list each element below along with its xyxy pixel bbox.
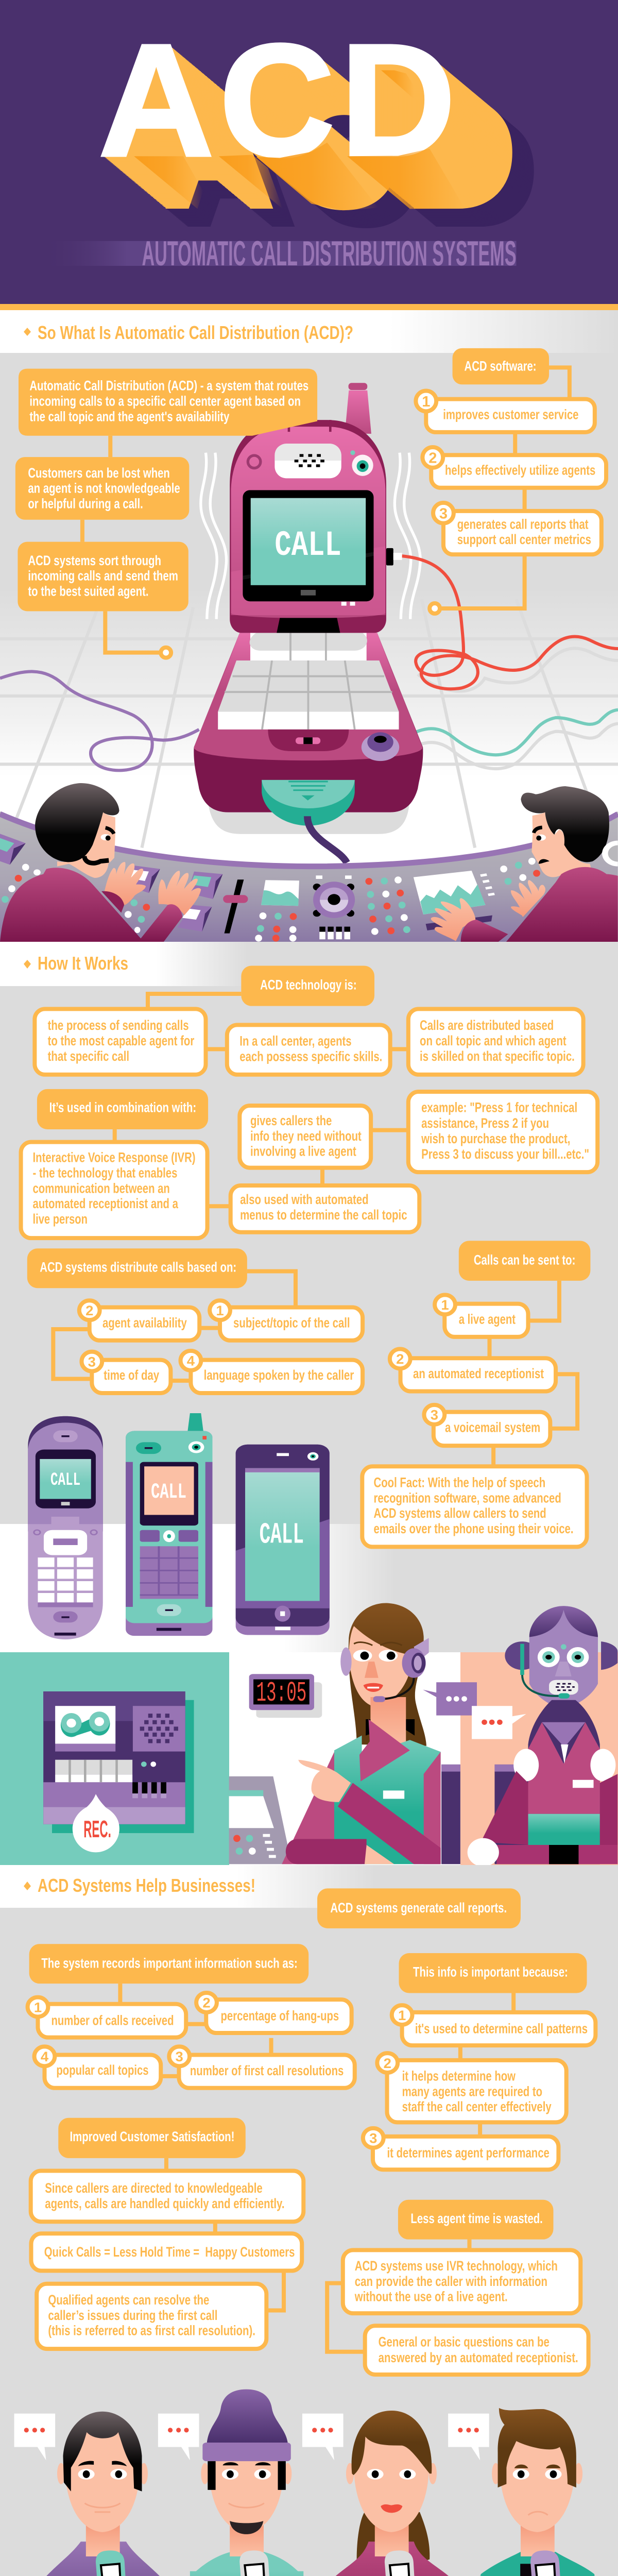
speech bubble: white	[472, 1706, 526, 1739]
box: example	[408, 1092, 597, 1172]
camera eye	[352, 454, 373, 476]
icon: digital clock: 13:05	[256, 1677, 306, 1709]
box: used in combination: It’s used in combination with:	[49, 1099, 196, 1115]
item: language: language spoken by the caller	[204, 1367, 354, 1383]
speech bubble: purple	[423, 1682, 477, 1716]
item: agent performance	[363, 2128, 558, 2170]
icon: lavender flip phone	[28, 1416, 103, 1639]
box: automated menus: menus to determine the call topic	[240, 1207, 407, 1223]
teal cord	[394, 710, 618, 755]
teal pocket	[262, 780, 355, 826]
definition box	[19, 369, 317, 436]
item 2: 2	[428, 450, 437, 467]
item: voicemail	[424, 1405, 550, 1446]
item: call patterns: 1	[398, 2008, 406, 2023]
panel: ACD software list	[416, 348, 606, 614]
box: ACD technology is	[241, 966, 374, 1006]
phone upper body	[230, 420, 402, 633]
title shading on extruded letters	[134, 70, 458, 210]
box: agent skills	[227, 1025, 390, 1075]
illustration: pink flip phone with cords	[0, 383, 618, 863]
speech bubble	[158, 2414, 199, 2460]
vibration lines	[201, 453, 420, 619]
item: number of calls: number of calls received	[51, 2012, 174, 2028]
purple cable	[307, 816, 347, 863]
sorting box: ACD systems sort through	[28, 553, 161, 568]
item: voicemail: a voicemail system	[445, 1419, 540, 1435]
item: time of day: time of day	[104, 1367, 159, 1383]
box: IVR technology	[343, 2250, 580, 2313]
item: first call resolutions	[169, 2046, 355, 2088]
icon: smartphone: CALL	[260, 1519, 304, 1552]
section heading: So What Is ACD: So What Is Automatic Call Distribution (ACD)?	[38, 322, 353, 343]
robot agent	[468, 1606, 617, 1867]
box: gives callers info: involving a live agent	[250, 1143, 356, 1159]
box: process of sending calls: that specific call	[48, 1048, 129, 1064]
item: automated receptionist	[390, 1349, 556, 1392]
section heading: How It Works: How It Works	[38, 953, 128, 974]
phone upper body: CALL	[274, 526, 341, 566]
left operator	[0, 783, 201, 942]
item 1: 1	[422, 394, 430, 410]
console fragment	[229, 1776, 291, 1864]
purple cord	[0, 671, 199, 770]
icon: lavender flip phone: CALL	[50, 1469, 80, 1490]
item: first call resolutions: 3	[176, 2049, 183, 2064]
panel: voicemail and cool fact	[362, 1401, 587, 1547]
icon: digital clock	[249, 1674, 322, 1718]
person 4: man in teal jacket	[436, 2408, 617, 2576]
item: subject/topic: 1	[216, 1303, 224, 1318]
console keys	[0, 834, 299, 934]
box: IVR: - the technology that enables	[33, 1165, 177, 1180]
box: process of sending calls	[35, 1009, 205, 1075]
panel: teal recorder background	[0, 1652, 229, 1865]
box: qualified agents: (this is referred to as first call resolution).	[48, 2323, 255, 2338]
item: time of day	[81, 1352, 170, 1393]
subtitle: Automatic Call Distribution Systems	[41, 234, 517, 273]
box: less agent time	[398, 2200, 553, 2240]
item: time of day: 3	[88, 1354, 96, 1369]
icon: knob	[362, 732, 399, 761]
panel: definition boxes	[15, 369, 317, 658]
box: calls distributed	[408, 1009, 583, 1075]
box: ACD technology is: ACD technology is:	[260, 977, 357, 992]
box: important because	[399, 1953, 587, 1993]
phone	[492, 2550, 563, 2576]
box: IVR: automated receptionist and a	[33, 1196, 178, 1211]
item: a live agent	[435, 1295, 528, 1337]
panel: white clock background	[229, 1652, 460, 1865]
phone lower body	[194, 633, 423, 812]
header background	[0, 0, 618, 304]
sorting box: to the best suited agent.	[28, 583, 149, 599]
console lights	[2, 864, 297, 942]
box: qualified agents	[37, 2284, 266, 2349]
chart display	[414, 871, 495, 930]
section heading: So What Is ACD	[0, 310, 618, 353]
person 2: beanie and teal shirt	[146, 2389, 323, 2576]
box: qualified agents: caller’s issues during the first call	[48, 2307, 217, 2323]
box: gives callers info: info they need without	[250, 1128, 362, 1144]
box: quick calls	[31, 2233, 302, 2271]
box: distribute calls based on	[27, 1248, 247, 1288]
box: agent skills: In a call center, agents	[239, 1033, 352, 1048]
panel: peach background	[460, 1652, 618, 1865]
definition box: Automatic Call Distribution (ACD) - a system that routes	[29, 378, 308, 394]
red cord	[402, 556, 618, 689]
headset	[340, 1638, 429, 1702]
box: calls can be sent to	[459, 1241, 590, 1281]
box: improved satisfaction: Improved Customer Satisfaction!	[70, 2129, 234, 2144]
box: agent skills: each possess specific skills.	[239, 1048, 382, 1064]
desk bars	[441, 1765, 528, 1864]
illustration: operators console, left half	[0, 783, 618, 942]
section heading: ACD Systems Help Businesses	[0, 1865, 376, 1908]
section background: gray	[0, 1865, 618, 2576]
item: agent performance: 3	[369, 2131, 377, 2146]
item: language	[181, 1351, 363, 1393]
item: first call resolutions: number of first call resolutions	[190, 2063, 344, 2078]
item: hang-ups	[196, 1993, 352, 2033]
icon: tape recorder	[43, 1691, 194, 1852]
box: since callers: agents, calls are handled quickly and efficiently.	[45, 2195, 285, 2211]
box: cool fact	[362, 1466, 587, 1547]
pointing hand	[298, 1760, 351, 1802]
white band behind phones	[0, 1524, 618, 1652]
speech bubble	[448, 2414, 489, 2460]
console panel	[0, 811, 618, 942]
item: popular topics: 4	[41, 2049, 49, 2064]
item: call patterns	[392, 2005, 595, 2045]
item: a live agent: 1	[441, 1297, 449, 1313]
item: agent availability: 2	[85, 1303, 93, 1318]
box: general questions	[365, 2326, 589, 2375]
icon: antenna	[345, 383, 371, 434]
item: voicemail: 3	[431, 1408, 438, 1423]
box: since callers: Since callers are directed to knowledgeable	[45, 2180, 263, 2196]
icon: phone shadow	[207, 792, 410, 834]
box: quick calls: Quick Calls = Less Hold Time = Happy Customers	[44, 2244, 295, 2260]
REC bubble	[73, 1794, 119, 1852]
icon: tape recorder: REC.	[83, 1816, 111, 1842]
box: system records: The system records important information such as:	[41, 1955, 298, 1971]
customers box	[15, 457, 189, 520]
definition box: incoming calls to a specific call center agent based on	[29, 394, 301, 409]
item 2	[422, 447, 606, 488]
orange divider bar	[0, 304, 618, 310]
icon: smartphone	[236, 1445, 330, 1635]
box: gives callers info	[239, 1106, 371, 1168]
speaker	[274, 444, 341, 478]
screen	[243, 490, 374, 601]
box: IVR: live person	[33, 1211, 88, 1227]
icon: teal brick phone: CALL	[151, 1480, 186, 1504]
console lights	[365, 858, 540, 935]
item: hang-ups: 2	[202, 1995, 211, 2011]
item: language: 4	[187, 1353, 195, 1369]
box: qualified agents: Qualified agents can resolve the	[48, 2292, 209, 2308]
box: automated menus	[231, 1185, 419, 1232]
item: automated receptionist: 2	[396, 1351, 404, 1367]
box: distribute calls based on: ACD systems distribute calls based on:	[40, 1259, 236, 1275]
box: automated menus: also used with automated	[240, 1192, 369, 1207]
panel: how it works flow	[21, 966, 597, 1401]
section heading: How It Works	[0, 942, 247, 986]
customers box: or helpful during a call.	[28, 496, 143, 512]
box: process of sending calls: the process of sending calls	[48, 1017, 189, 1033]
customers box: an agent is not knowledgeable	[28, 481, 180, 496]
box: used in combination	[37, 1089, 208, 1129]
item: hang-ups: percentage of hang-ups	[221, 2008, 339, 2023]
speech bubble	[14, 2414, 55, 2460]
item: a live agent: a live agent	[459, 1311, 516, 1327]
item: subject/topic: subject/topic of the call	[233, 1315, 350, 1330]
item 3: 3	[439, 505, 448, 522]
item: how many agents: it helps determine how	[402, 2068, 516, 2083]
box: IVR: Interactive Voice Response (IVR)	[33, 1149, 196, 1165]
box heading: ACD software:	[465, 358, 537, 374]
knob	[313, 875, 355, 939]
item: agent availability: agent availability	[102, 1315, 187, 1330]
item: number of calls: 1	[34, 2000, 42, 2015]
box: generate call reports	[317, 1888, 521, 1928]
item: popular topics	[35, 2046, 161, 2088]
box: IVR	[21, 1142, 208, 1238]
section heading: ACD Systems Help Businesses: ACD Systems Help Businesses!	[38, 1875, 255, 1896]
floor background with tiles	[0, 351, 618, 942]
icon: teal brick phone	[126, 1413, 212, 1636]
phone	[346, 2550, 418, 2576]
item: how many agents: 2	[384, 2056, 391, 2071]
box: IVR technology: without the use of a live agent.	[354, 2289, 508, 2304]
item: number of calls	[28, 1997, 186, 2038]
jack	[386, 548, 393, 566]
illustration: operators console, right half	[313, 786, 618, 942]
panel: four callers illustration	[0, 2389, 617, 2576]
box: IVR: communication between an	[33, 1180, 170, 1196]
woman agent	[282, 1603, 441, 1864]
item 3	[433, 503, 602, 554]
customers box: Customers can be lost when	[28, 465, 170, 481]
phone	[96, 2550, 129, 2576]
item: agent availability	[79, 1300, 199, 1341]
title: ACD: ACD	[98, 10, 456, 190]
item: how many agents	[377, 2053, 566, 2122]
speech bubble	[302, 2414, 344, 2460]
box: gives callers info: gives callers the	[250, 1112, 332, 1128]
item 1: improves customer service	[443, 407, 578, 422]
item: subject/topic	[210, 1300, 363, 1341]
section background: gray	[0, 942, 618, 1524]
item: popular topics: popular call topics	[56, 2062, 149, 2078]
phone	[201, 2550, 273, 2576]
panel: phones and agents illustration	[28, 1413, 617, 1867]
right operator	[431, 786, 618, 942]
person 1: purple shirt	[0, 2412, 171, 2576]
box: improved satisfaction	[58, 2118, 246, 2158]
definition box: the call topic and the agent's availability	[29, 409, 229, 424]
box: since callers	[31, 2171, 303, 2222]
box: process of sending calls: to the most capable agent for	[48, 1032, 194, 1048]
jacket	[282, 1736, 362, 1864]
sorting box: incoming calls and send them	[28, 568, 178, 584]
box heading	[453, 348, 549, 384]
box: system records	[29, 1944, 308, 1984]
item 1	[416, 391, 595, 432]
sorting box	[18, 542, 188, 611]
panel: help businesses flow	[28, 1888, 595, 2375]
person 3: woman in pink	[289, 2411, 460, 2576]
